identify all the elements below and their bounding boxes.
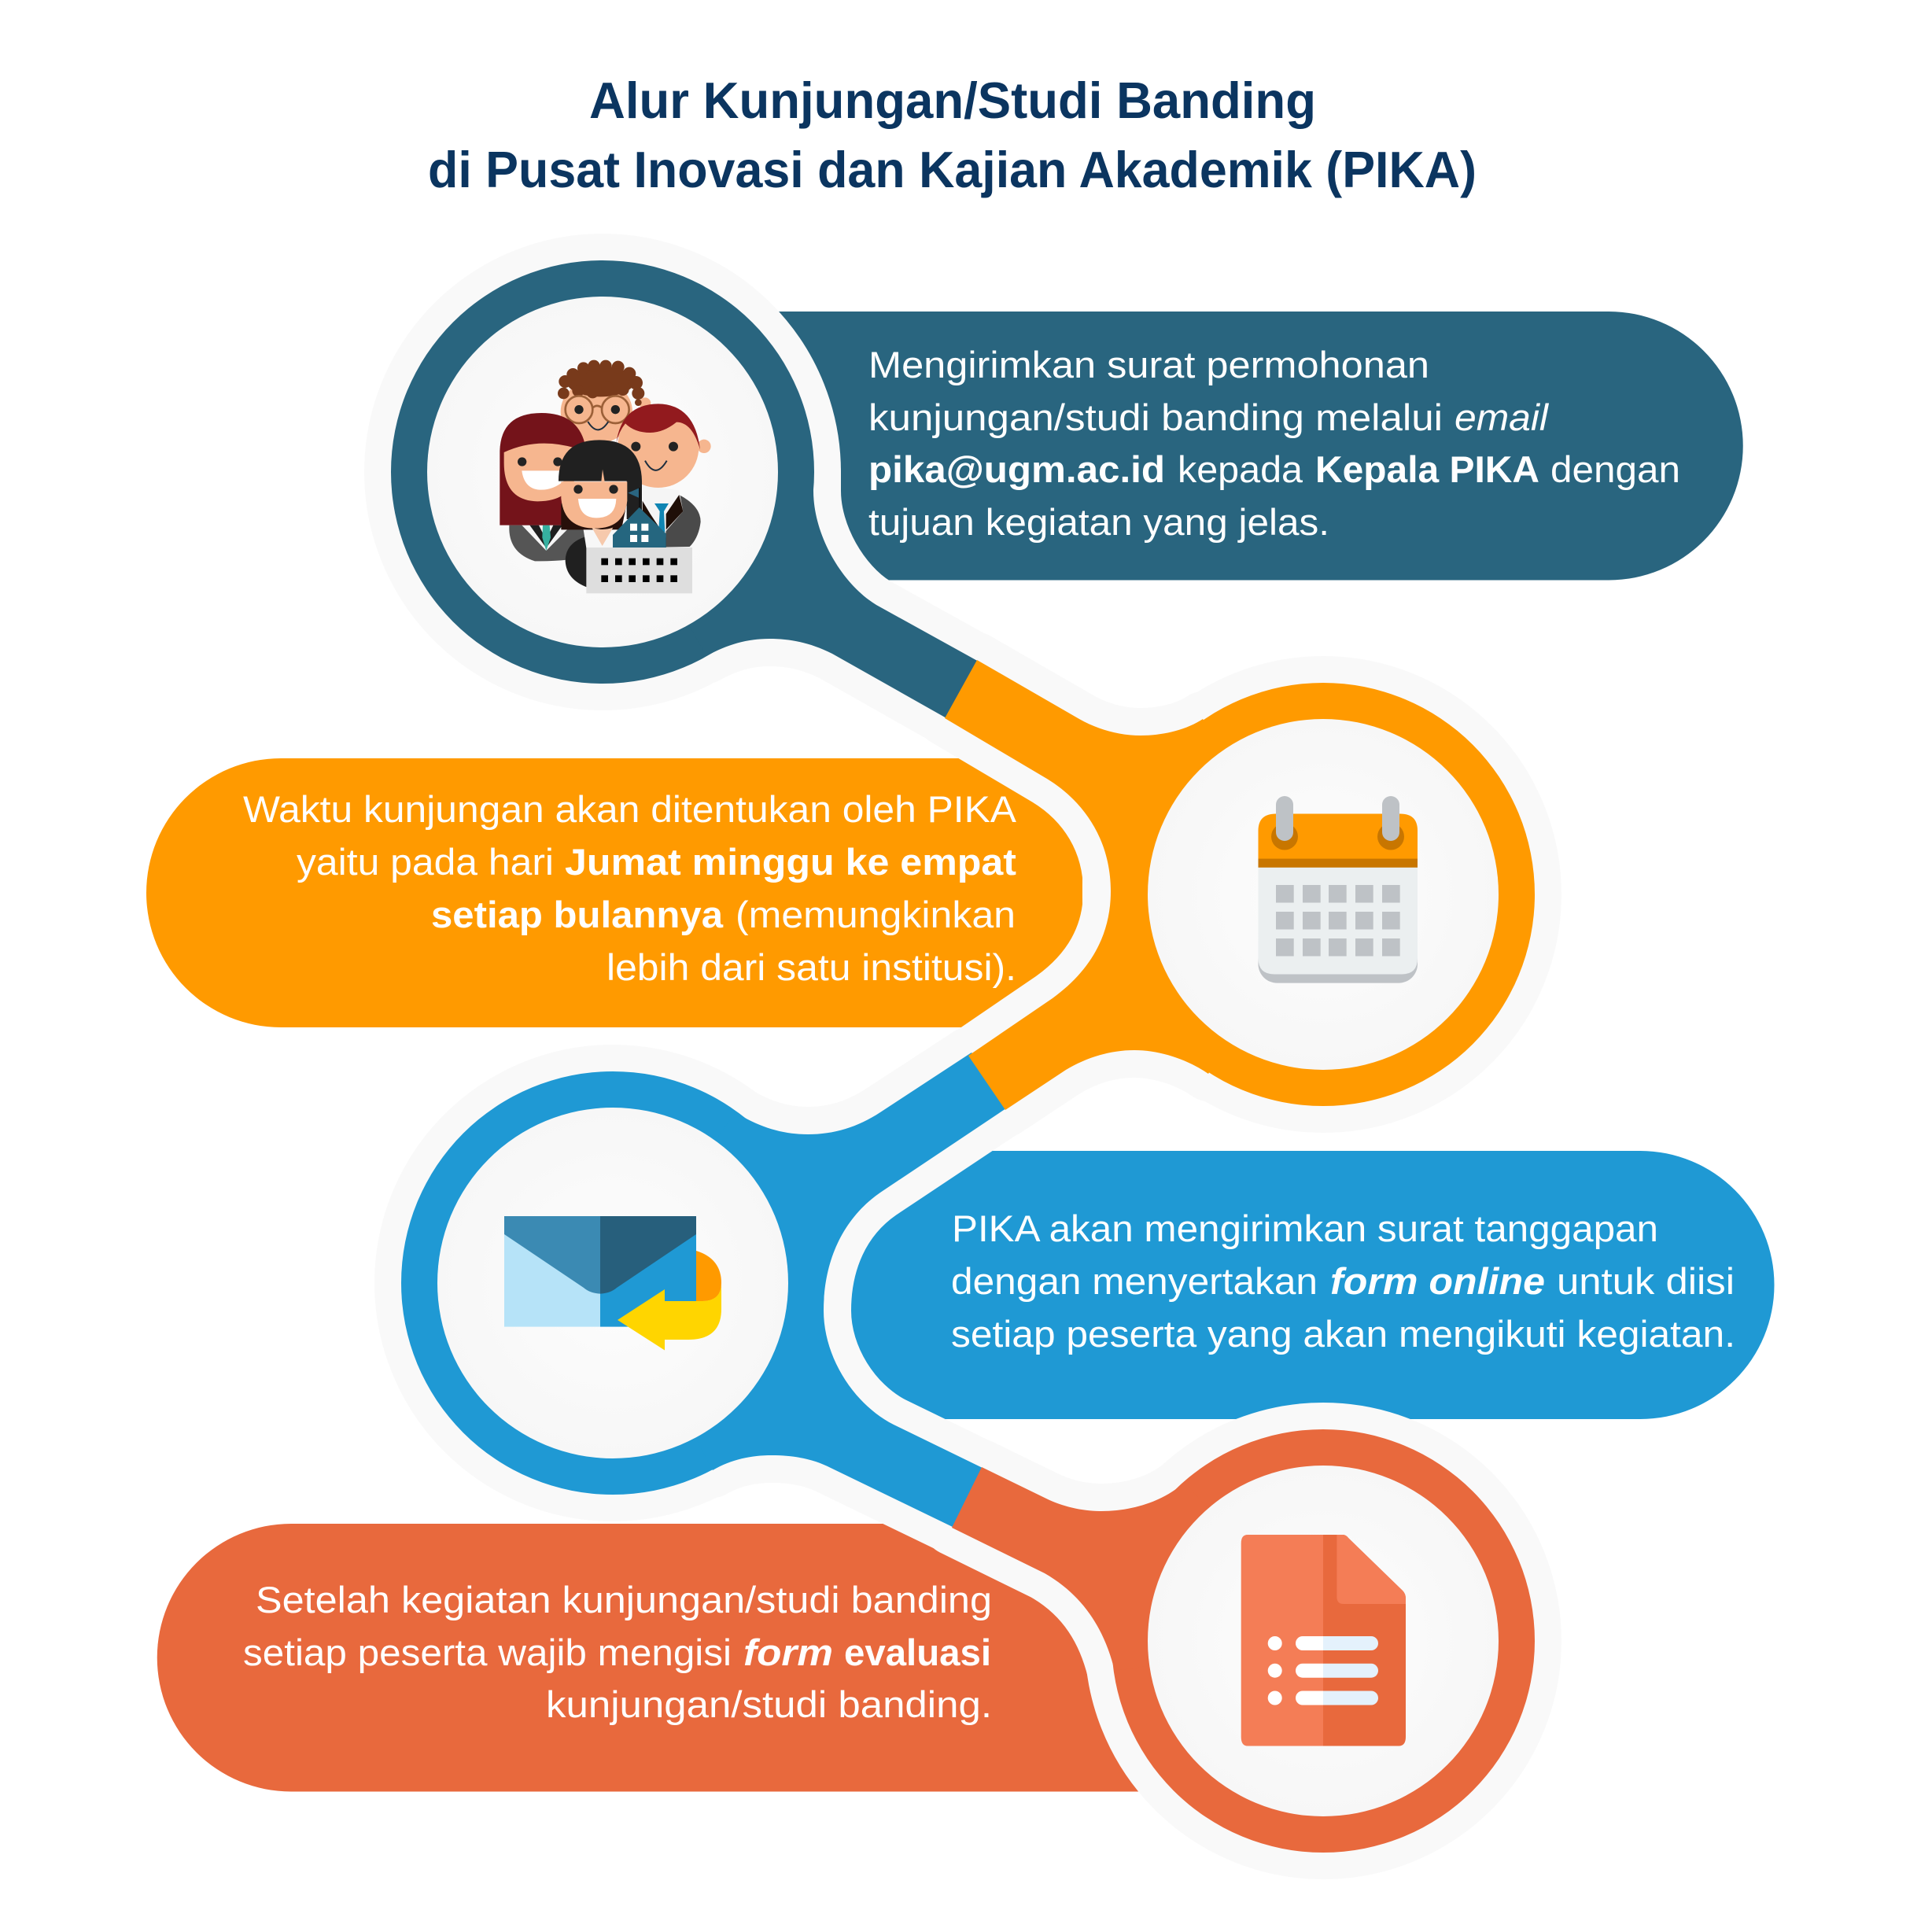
text: step 1: dengan [1550, 448, 1680, 490]
inner disc: step 4 [1148, 1466, 1499, 1816]
text: step 1: email [1455, 396, 1550, 438]
ring and connector: step 4 [952, 1429, 1535, 1853]
text: step 4: kunjungan/studi banding. [546, 1683, 992, 1725]
title: di Pusat Inovasi dan Kajian Akademik (PIKA) [428, 141, 1477, 198]
text: step 1: kunjungan/studi banding melalui [868, 396, 1443, 438]
text: step 3: setiap peserta yang akan mengikuti kegiatan. [951, 1313, 1735, 1355]
text: step 4: form [743, 1632, 833, 1673]
text: step 3: dengan menyertakan [951, 1260, 1318, 1302]
halo around connector chain [392, 261, 1534, 1852]
ring and connector: step 1 [391, 260, 980, 719]
inner disc: step 3 [437, 1108, 788, 1458]
text: step 2: yaitu pada hari [297, 841, 554, 883]
text: step 2 [243, 788, 1017, 988]
text: step 3: PIKA akan mengirimkan surat tanggapan [952, 1208, 1658, 1249]
text: step 2: lebih dari satu institusi). [607, 946, 1016, 988]
text: step 4 [243, 1579, 992, 1725]
text: step 1: Kepala PIKA [1315, 448, 1539, 490]
text: step 1 [868, 344, 1680, 543]
text: step 1: kepada [1178, 448, 1303, 490]
title [428, 72, 1477, 198]
text: step 4: evaluasi [844, 1632, 991, 1673]
text: step 1: tujuan kegiatan yang jelas. [868, 501, 1329, 543]
text: step 3: untuk diisi [1557, 1260, 1735, 1302]
panel: step 4 bar [157, 1524, 1180, 1792]
panel: step 3 bar [850, 1151, 1775, 1419]
text: step 3 [951, 1208, 1735, 1355]
text: step 2: setiap bulannya [431, 894, 724, 935]
icon: form document [1241, 1535, 1406, 1746]
ring and connector: step 3 [401, 1053, 1008, 1528]
text: step 3: form online [1330, 1260, 1545, 1302]
text: step 1: pika@ugm.ac.id [868, 448, 1165, 490]
icon: people and campus building [500, 360, 711, 593]
panel: step 1 bar [708, 312, 1743, 581]
title: Alur Kunjungan/Studi Banding [589, 72, 1316, 129]
ring and connector: step 2 [945, 660, 1535, 1110]
text: step 2: (memungkinkan [736, 894, 1016, 935]
icon: envelope with reply arrow [504, 1216, 721, 1350]
text: step 1: Mengirimkan surat permohonan [868, 344, 1429, 385]
panel: step 2 bar [146, 758, 1082, 1027]
text: step 2: Jumat minggu ke empat [565, 841, 1016, 883]
icon: calendar [1259, 796, 1418, 983]
text: step 2: Waktu kunjungan akan ditentukan oleh PIKA [243, 788, 1017, 830]
text: step 4: Setelah kegiatan kunjungan/studi banding [256, 1579, 992, 1620]
inner disc: step 1 [427, 297, 778, 647]
text: step 4: setiap peserta wajib mengisi [243, 1632, 732, 1673]
inner disc: step 2 [1148, 719, 1499, 1070]
